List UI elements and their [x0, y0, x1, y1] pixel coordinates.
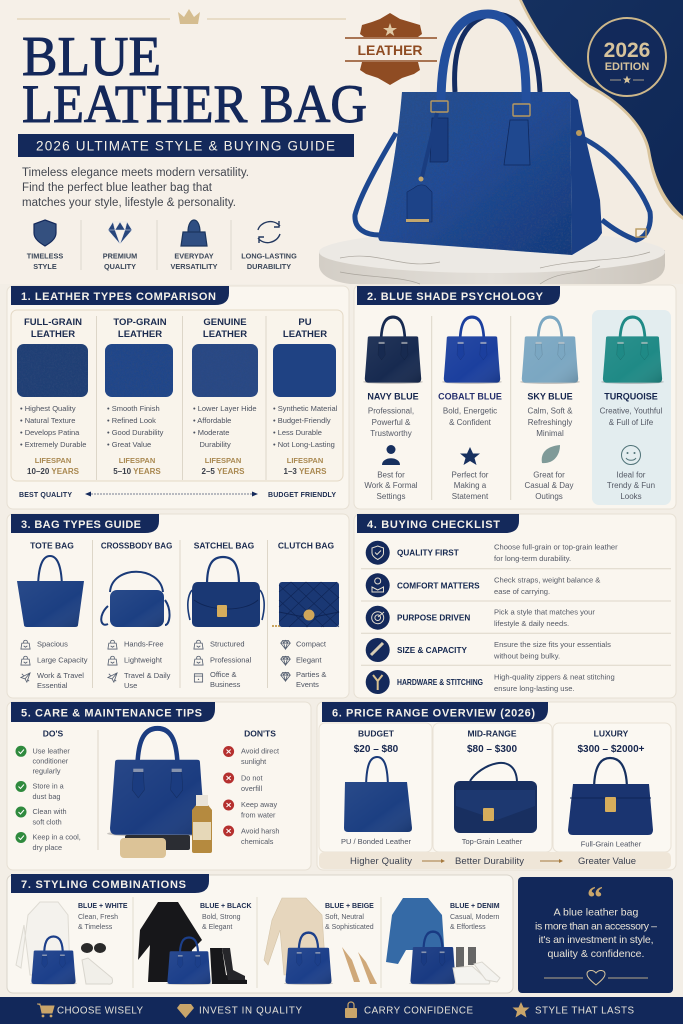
quote panel: “: [587, 879, 603, 915]
icon: shield: [34, 220, 56, 246]
row: size and capacity: Ensure the size fits your essentials: [494, 640, 611, 649]
column: genuine: • Lower Layer Hide: [193, 404, 256, 413]
tier: luxury: LUXURY: [594, 728, 629, 738]
type: crossbody: Travel & Daily: [124, 671, 171, 680]
subtitle banner: [18, 134, 354, 157]
icon labels: [27, 252, 297, 271]
care product photo: [107, 728, 212, 858]
highlight: turquoise: [592, 310, 671, 505]
value strip: Higher Quality: [350, 856, 412, 867]
column: PU: • Budget-Friendly: [273, 416, 331, 425]
section heading 4: 4. BUYING CHECKLIST: [367, 519, 500, 531]
panel: price range overview: [317, 702, 676, 870]
outfit: blue + denim: BLUE + DENIM: [450, 903, 500, 910]
column: PU: LIFESPAN: [287, 456, 323, 465]
column: PU: LEATHER: [283, 329, 327, 340]
column: genuine: Durability: [200, 440, 231, 449]
column: genuine: LEATHER: [203, 329, 247, 340]
column: genuine: • Moderate: [193, 428, 229, 437]
column: full-grain: LIFESPAN: [35, 456, 71, 465]
row: size and capacity: SIZE & CAPACITY: [397, 646, 467, 655]
row: purpose driven: PURPOSE DRIVEN: [397, 614, 470, 623]
outfit: blue + denim: Casual, Modern: [450, 914, 500, 921]
tier: luxury: $300 – $2000+: [577, 744, 645, 755]
panel: buying checklist: [354, 514, 676, 698]
row: hardware and stitching: ensure long-lasting use.: [494, 684, 575, 693]
hero blue handbag: [355, 14, 650, 255]
icon labels: TIMELESS: [27, 252, 63, 260]
intro text: Timeless elegance meets modern versatility.: [22, 167, 249, 179]
section heading 2: 2. BLUE SHADE PSYCHOLOGY: [367, 291, 544, 303]
shade: sky: Refreshingly: [528, 418, 572, 427]
type: clutch: CLUTCH BAG: [278, 540, 334, 550]
row: comfort matters: Check straps, weight balance &: [494, 576, 600, 584]
section heading 1: [11, 286, 229, 305]
row: size and capacity: [366, 638, 611, 662]
column: top-grain: TOP-GRAIN: [113, 317, 167, 328]
section heading 2: [357, 286, 560, 305]
outfit: blue + black: Bold, Strong: [202, 914, 241, 921]
panel: styling combinations: [7, 874, 513, 993]
column: genuine: • Affordable: [193, 416, 231, 425]
row: comfort matters: ease of carrying.: [494, 587, 550, 596]
section heading 1: 1. LEATHER TYPES COMPARISON: [21, 291, 216, 303]
outfit: blue + white: [16, 902, 128, 985]
column: full-grain: • Extremely Durable: [20, 440, 86, 449]
outfit: blue + black: & Elegant: [202, 924, 232, 931]
quality scale arrow: BUDGET FRIENDLY: [268, 492, 336, 499]
section heading 3: 3. BAG TYPES GUIDE: [21, 519, 141, 531]
row: comfort matters: [366, 573, 600, 597]
don'ts list: chemicals: [241, 837, 274, 846]
tier: budget: [319, 723, 432, 852]
shade: turquoise: [600, 317, 664, 501]
shade: navy: Work & Formal: [364, 481, 418, 490]
shade: navy: Settings: [377, 492, 405, 501]
don'ts list: Keep away: [241, 800, 277, 809]
column: top-grain: • Great Value: [107, 440, 151, 449]
do's list: Keep in a cool,: [32, 832, 81, 842]
don'ts list: Do not: [241, 774, 262, 782]
do's list: dry place: [32, 843, 62, 852]
shade: navy: Best for: [377, 470, 405, 480]
footer: style that lasts: STYLE THAT LASTS: [535, 1006, 634, 1016]
footer: choose wisely: [37, 1004, 143, 1017]
do's list: Use leather: [32, 746, 70, 756]
shade: turquoise: & Full of Life: [609, 418, 654, 427]
section heading 7: 7. STYLING COMBINATIONS: [21, 879, 186, 891]
column: top-grain: • Refined Look: [107, 416, 156, 425]
do's list: dust bag: [32, 792, 60, 801]
type: tote: Work & Travel: [37, 671, 84, 680]
hero header: [0, 0, 683, 284]
type: tote: Spacious: [37, 640, 68, 648]
shade: sky: Great for: [533, 470, 565, 480]
quality scale arrow: [19, 492, 336, 499]
value strip: Better Durability: [455, 856, 524, 867]
intro text: matches your style, lifestyle & personality.: [22, 197, 236, 209]
don'ts list: overfill: [241, 784, 262, 793]
panel: leather types comparison: [7, 286, 349, 509]
row: purpose driven: lifestyle & daily needs.: [494, 619, 569, 628]
column: genuine: 2–5 YEARS: [202, 467, 245, 476]
value strip: [319, 852, 671, 869]
don'ts list: [223, 728, 279, 846]
column: top-grain: LIFESPAN: [119, 456, 155, 465]
section heading 5: 5. CARE & MAINTENANCE TIPS: [21, 708, 202, 720]
shade: turquoise: Creative, Youthful: [600, 406, 663, 416]
comparison table: [11, 310, 343, 481]
panel: bag types guide: [7, 514, 349, 698]
marble pedestal: [319, 231, 665, 284]
column: top-grain: LEATHER: [118, 329, 162, 340]
column: full-grain: • Highest Quality: [20, 404, 76, 413]
shade: sky: Outings: [535, 492, 563, 501]
shade: navy: [363, 317, 423, 501]
tier: mid-range: [433, 723, 552, 852]
do's list: [16, 728, 81, 852]
column: top-grain: • Good Durability: [107, 428, 164, 437]
outfit: blue + beige: & Sophisticated: [325, 924, 374, 931]
shade: sky: Calm, Soft &: [528, 406, 573, 416]
column: PU: • Not Long-Lasting: [273, 440, 335, 449]
shade: turquoise: TURQUOISE: [604, 392, 658, 402]
column: full-grain: • Natural Texture: [20, 416, 75, 425]
icon labels: PREMIUM: [103, 252, 137, 260]
column: PU: PU: [298, 317, 312, 328]
icon: cycle arrows: [258, 221, 280, 243]
shade: sky: [520, 317, 580, 501]
navy corner panel: [519, 0, 683, 220]
outfit: blue + white: & Timeless: [78, 924, 113, 931]
quote panel: it's an investment in style,: [538, 934, 654, 946]
leather badge: [345, 13, 437, 85]
row: comfort matters: COMFORT MATTERS: [397, 581, 480, 590]
icon: handbag: [181, 220, 207, 246]
type: satchel: Professional: [210, 656, 252, 664]
type: crossbody: CROSSBODY BAG: [101, 542, 172, 550]
row: hardware and stitching: High-quality zippers & neat stitching: [494, 672, 615, 682]
leather badge: LEATHER: [358, 42, 422, 58]
type: clutch: [272, 540, 339, 689]
column: top-grain: • Smooth Finish: [107, 404, 160, 413]
quote panel: is more than an accessory –: [535, 920, 657, 932]
outfit: blue + white: BLUE + WHITE: [78, 903, 128, 910]
section heading 4: [357, 514, 519, 533]
tier: budget: BUDGET: [358, 728, 395, 738]
shade: cobalt: Making a: [454, 481, 487, 490]
shade: turquoise: Ideal for: [617, 470, 646, 480]
outfit: blue + beige: BLUE + BEIGE: [325, 903, 374, 910]
type: tote: Large Capacity: [37, 656, 88, 664]
tier: mid-range: MID-RANGE: [467, 728, 517, 738]
don'ts list: from water: [241, 810, 276, 820]
shade: navy: Professional,: [368, 406, 414, 416]
tier: luxury: Full-Grain Leather: [581, 840, 642, 848]
column: full-grain: • Develops Patina: [20, 428, 80, 437]
do's list: regularly: [32, 766, 61, 776]
row: hardware and stitching: HARDWARE & STITCHING: [397, 678, 483, 687]
footer band: [0, 997, 683, 1024]
shade: cobalt: Statement: [452, 492, 489, 501]
column: top-grain: [105, 317, 173, 476]
type: tote: TOTE BAG: [30, 540, 74, 550]
shade: cobalt: Perfect for: [452, 470, 489, 480]
tier: luxury: [553, 723, 671, 852]
footer: invest in quality: INVEST IN QUALITY: [199, 1006, 302, 1016]
icon labels: EVERYDAY: [174, 252, 214, 260]
icon: heart divider: [544, 970, 648, 985]
row: quality first: Choose full-grain or top-grain leather: [494, 542, 618, 552]
footer: choose wisely: CHOOSE WISELY: [57, 1006, 143, 1016]
type: satchel: Structured: [210, 640, 245, 648]
row: hardware and stitching: [366, 670, 615, 694]
column: genuine: [192, 317, 258, 476]
type: satchel: Business: [210, 680, 241, 689]
section heading 7: [11, 874, 209, 893]
subtitle banner: 2026 ULTIMATE STYLE & BUYING GUIDE: [36, 138, 335, 154]
outfit: blue + white: Clean, Fresh: [78, 914, 118, 921]
shade: turquoise: Trendy & Fun: [607, 481, 655, 490]
do's list: Clean with: [32, 807, 67, 816]
shade: cobalt: & Confident: [449, 418, 492, 427]
do's list: soft cloth: [32, 818, 62, 826]
panel: care and maintenance: [7, 702, 311, 870]
type: satchel: Office &: [210, 670, 237, 679]
shade: sky: Casual & Day: [525, 481, 573, 490]
outfit: blue + denim: [386, 898, 500, 985]
type: clutch: Events: [296, 680, 319, 689]
edition badge: 2026: [604, 39, 650, 62]
outfit: blue + denim: & Effortless: [450, 924, 486, 931]
shade: turquoise: Looks: [620, 492, 642, 501]
quote panel: quality & confidence.: [548, 948, 644, 960]
quality scale arrow: BEST QUALITY: [19, 492, 72, 499]
edition badge: EDITION: [605, 61, 649, 73]
row: purpose driven: Pick a style that matches your: [494, 608, 595, 616]
icon labels: QUALITY: [104, 262, 136, 271]
type: tote: Essential: [37, 681, 68, 690]
feature icons row: [27, 220, 297, 271]
icon labels: STYLE: [33, 262, 57, 271]
row: quality first: QUALITY FIRST: [397, 549, 459, 558]
footer: carry confidence: CARRY CONFIDENCE: [364, 1006, 473, 1016]
don'ts list: sunlight: [241, 757, 266, 766]
shade: navy: Trustworthy: [370, 429, 412, 438]
shade: cobalt: COBALT BLUE: [438, 392, 502, 402]
shade: sky: Minimal: [536, 429, 564, 438]
outfit: blue + black: [138, 902, 252, 985]
row: purpose driven: [366, 606, 595, 630]
quote panel: A blue leather bag: [554, 906, 638, 918]
column: PU: 1–3 YEARS: [284, 467, 327, 476]
column: full-grain: FULL-GRAIN: [24, 317, 82, 328]
type: clutch: Compact: [296, 640, 327, 648]
column: PU: [273, 317, 338, 476]
column: PU: • Synthetic Material: [273, 404, 338, 413]
row: quality first: [366, 541, 618, 565]
quote panel: [518, 877, 673, 993]
type: crossbody: Lightweight: [124, 656, 163, 664]
crown ornament: [17, 9, 346, 24]
do's list: Store in a: [32, 782, 65, 790]
shade: navy: Powerful &: [372, 418, 411, 427]
footer: style that lasts: [512, 1002, 634, 1018]
column: top-grain: 5–10 YEARS: [113, 467, 161, 476]
footer: carry confidence: [345, 1002, 473, 1018]
shade: cobalt: [438, 317, 502, 501]
don'ts list: Avoid direct: [241, 746, 279, 756]
section heading 3: [11, 514, 159, 533]
shade: navy: NAVY BLUE: [367, 392, 419, 402]
shade: sky: SKY BLUE: [527, 392, 573, 402]
outfit: blue + black: BLUE + BLACK: [200, 903, 252, 910]
intro text: [22, 167, 249, 209]
tier: budget: PU / Bonded Leather: [341, 837, 412, 846]
type: tote: [17, 540, 88, 690]
icon labels: DURABILITY: [247, 262, 291, 271]
type: satchel: [188, 540, 264, 689]
do's list: conditioner: [32, 756, 69, 766]
type: satchel: SATCHEL BAG: [194, 540, 255, 550]
footer: invest in quality: [177, 1004, 302, 1018]
section heading 6: 6. PRICE RANGE OVERVIEW (2026): [332, 708, 535, 720]
title: BLUE: [22, 26, 161, 88]
edition badge: [588, 18, 666, 96]
outfit: blue + beige: Soft, Neutral: [325, 914, 364, 921]
type: crossbody: Use: [124, 681, 137, 690]
type: clutch: Elegant: [296, 656, 322, 664]
type: crossbody: Hands-Free: [124, 640, 164, 648]
column: genuine: GENUINE: [203, 317, 247, 328]
column: PU: • Less Durable: [273, 428, 322, 437]
column: full-grain: 10–20 YEARS: [27, 467, 80, 476]
panel: blue shade psychology: [354, 285, 676, 509]
tier: mid-range: $80 – $300: [467, 744, 517, 755]
section heading 6: [322, 702, 548, 722]
section heading 5: [11, 702, 215, 722]
row: size and capacity: without being bulky.: [493, 652, 560, 660]
title: [22, 26, 367, 134]
value strip: Greater Value: [578, 856, 636, 867]
shade: cobalt: Bold, Energetic: [443, 406, 497, 416]
type: clutch: Parties &: [296, 670, 326, 679]
intro text: Find the perfect blue leather bag that: [22, 182, 213, 194]
icon: diamond: [108, 222, 132, 244]
outfit: blue + beige: [264, 898, 377, 985]
icon labels: LONG-LASTING: [241, 252, 297, 260]
type: crossbody: [101, 542, 172, 690]
column: full-grain: LEATHER: [31, 329, 75, 340]
tier: mid-range: Top-Grain Leather: [462, 837, 523, 846]
do's list: DO'S: [43, 728, 64, 738]
don'ts list: DON'TS: [244, 728, 276, 738]
column: full-grain: [17, 317, 88, 476]
title: LEATHER BAG: [22, 74, 367, 134]
don'ts list: Avoid harsh: [241, 826, 279, 836]
row: quality first: for long-term durability.: [494, 554, 571, 563]
tier: budget: $20 – $80: [354, 744, 399, 755]
icon labels: VERSATILITY: [171, 262, 218, 271]
column: genuine: LIFESPAN: [205, 456, 241, 465]
